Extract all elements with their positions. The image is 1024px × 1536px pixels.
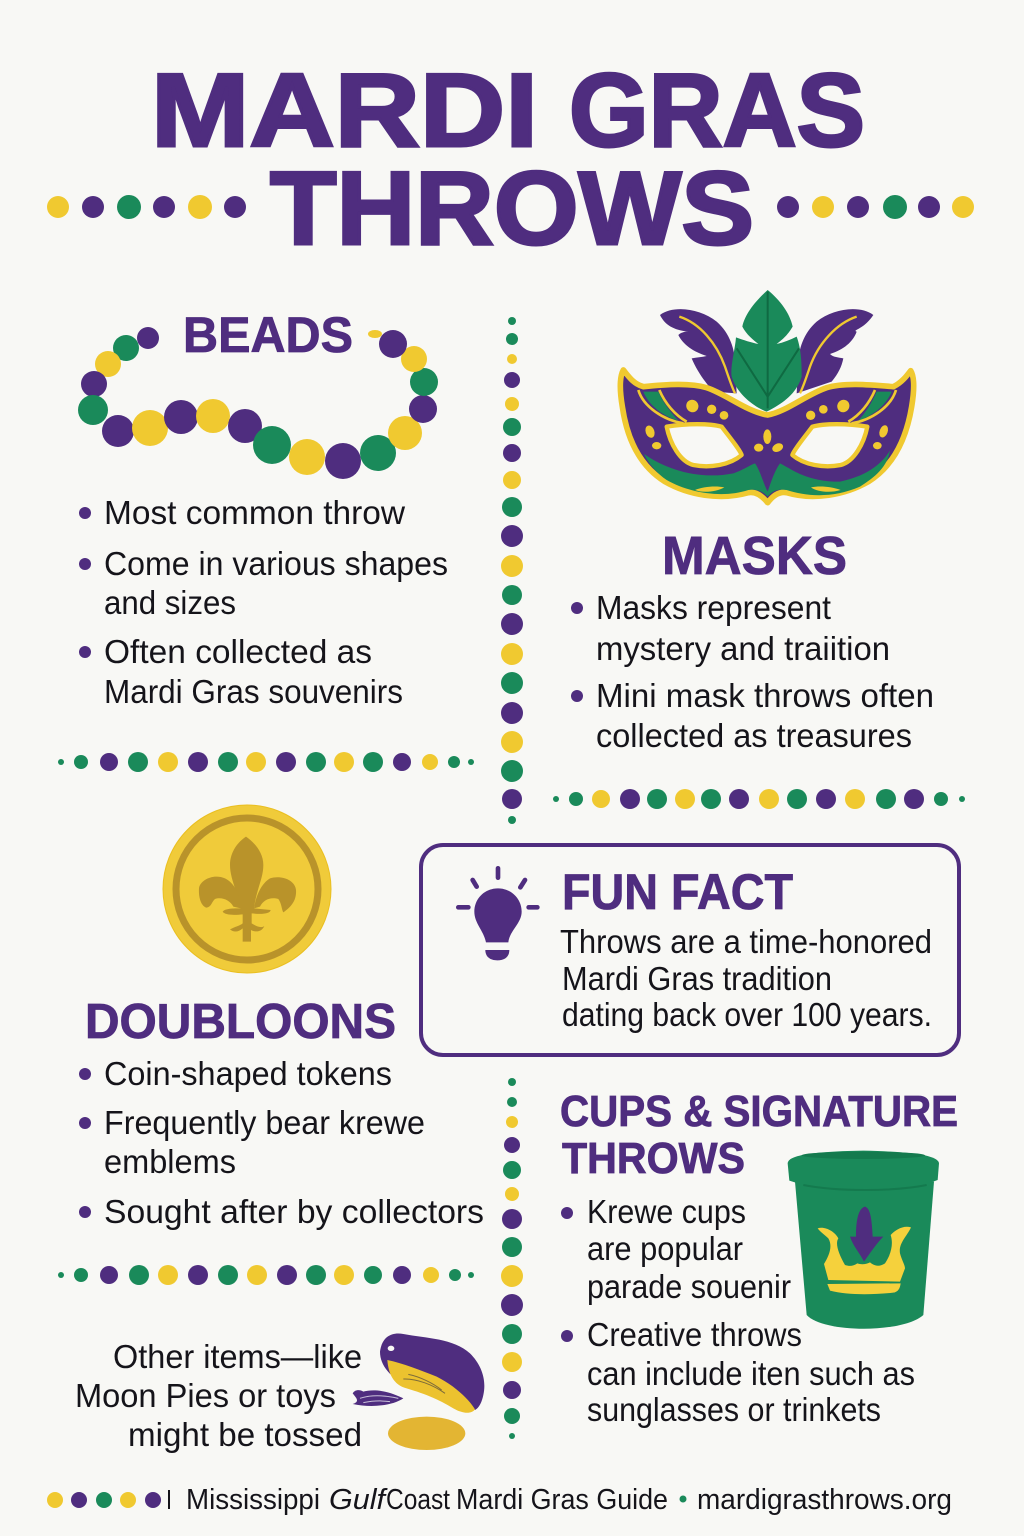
heading: beads: BEADS — [183, 307, 353, 363]
panel: doubloons — [79, 805, 484, 1230]
footer text — [186, 1484, 952, 1516]
masks bullet list — [571, 589, 934, 754]
doubloons bullet list: Sought after by collectors — [104, 1193, 484, 1230]
cups bullet list: can include iten such as — [587, 1355, 915, 1392]
icon: mardi gras mask — [620, 290, 914, 503]
panel: cups and signature throws — [560, 1087, 958, 1428]
icon: doubloon coin with fleur-de-lis — [163, 805, 331, 973]
title: MARDI — [151, 53, 538, 169]
heading: masks: MASKS — [662, 526, 847, 586]
doubloons bullet list: Frequently bear krewe — [104, 1104, 425, 1141]
beads bullet list: Most common throw — [104, 494, 405, 531]
panel: other items — [75, 1334, 484, 1453]
fun fact text — [560, 923, 932, 1033]
title: GRAS — [569, 53, 865, 169]
other items text: Other items—like — [113, 1338, 362, 1375]
masks bullet list: collected as treasures — [596, 717, 912, 754]
panel: masks — [571, 290, 934, 754]
bead divider: under beads — [58, 752, 474, 772]
icon: bead necklace — [78, 327, 438, 479]
masks bullet list: mystery and traiition — [596, 630, 890, 667]
footer — [47, 1484, 952, 1516]
icon: light bulb — [458, 868, 537, 960]
footer text: mardigrasthrows.org — [697, 1484, 952, 1516]
footer text: Mardi Gras Guide — [456, 1484, 668, 1516]
heading: cups and signature throws: CUPS & SIGNATURE — [560, 1087, 958, 1136]
title: THROWS — [270, 151, 754, 267]
bead divider: vertical top — [501, 317, 523, 824]
bead divider: under masks — [553, 789, 965, 809]
cups bullet list: Creative throws — [587, 1316, 802, 1353]
masks bullet list: Mini mask throws often — [596, 677, 934, 714]
cups bullet list — [561, 1193, 915, 1428]
cups bullet list: sunglasses or trinkets — [587, 1391, 881, 1428]
footer text: Gulf — [329, 1484, 388, 1516]
fun fact text: Throws are a time-honored — [560, 923, 932, 960]
heading: cups and signature throws: THROWS — [562, 1134, 745, 1183]
title beads right — [777, 195, 974, 219]
title beads left — [47, 195, 246, 219]
other items text — [75, 1338, 362, 1453]
beads bullet list — [79, 494, 448, 710]
icon: krewe cup — [788, 1151, 939, 1329]
cups bullet list: are popular — [587, 1230, 743, 1267]
doubloons bullet list: emblems — [104, 1143, 236, 1180]
other items text: might be tossed — [128, 1416, 362, 1453]
fun fact text: dating back over 100 years. — [562, 996, 932, 1033]
heading: cups and signature throws — [560, 1087, 958, 1183]
beads bullet list: Mardi Gras souvenirs — [104, 673, 403, 710]
beads bullet list: Come in various shapes — [104, 545, 448, 582]
heading: doubloons: DOUBLOONS — [85, 995, 396, 1049]
panel: beads — [78, 307, 448, 710]
heading: fun fact: FUN FACT — [562, 864, 793, 920]
doubloons bullet list: Coin-shaped tokens — [104, 1055, 392, 1092]
icon: moon pie and toys — [353, 1334, 484, 1450]
beads bullet list: Often collected as — [104, 633, 372, 670]
other items text: Moon Pies or toys — [75, 1377, 336, 1414]
footer beads — [47, 1490, 170, 1509]
footer text: Mississippi — [186, 1484, 320, 1516]
cups bullet list: parade souenir — [587, 1268, 791, 1305]
beads bullet list: and sizes — [104, 584, 236, 621]
bead divider: under doubloons — [58, 1265, 474, 1285]
footer text: Coast — [386, 1484, 450, 1516]
cups bullet list: Krewe cups — [587, 1193, 746, 1230]
panel: fun fact callout — [421, 845, 959, 1055]
bead divider: vertical bottom — [501, 1078, 523, 1439]
doubloons bullet list — [79, 1055, 484, 1230]
title — [151, 53, 865, 267]
masks bullet list: Masks represent — [596, 589, 831, 626]
fun fact text: Mardi Gras tradition — [562, 960, 832, 997]
